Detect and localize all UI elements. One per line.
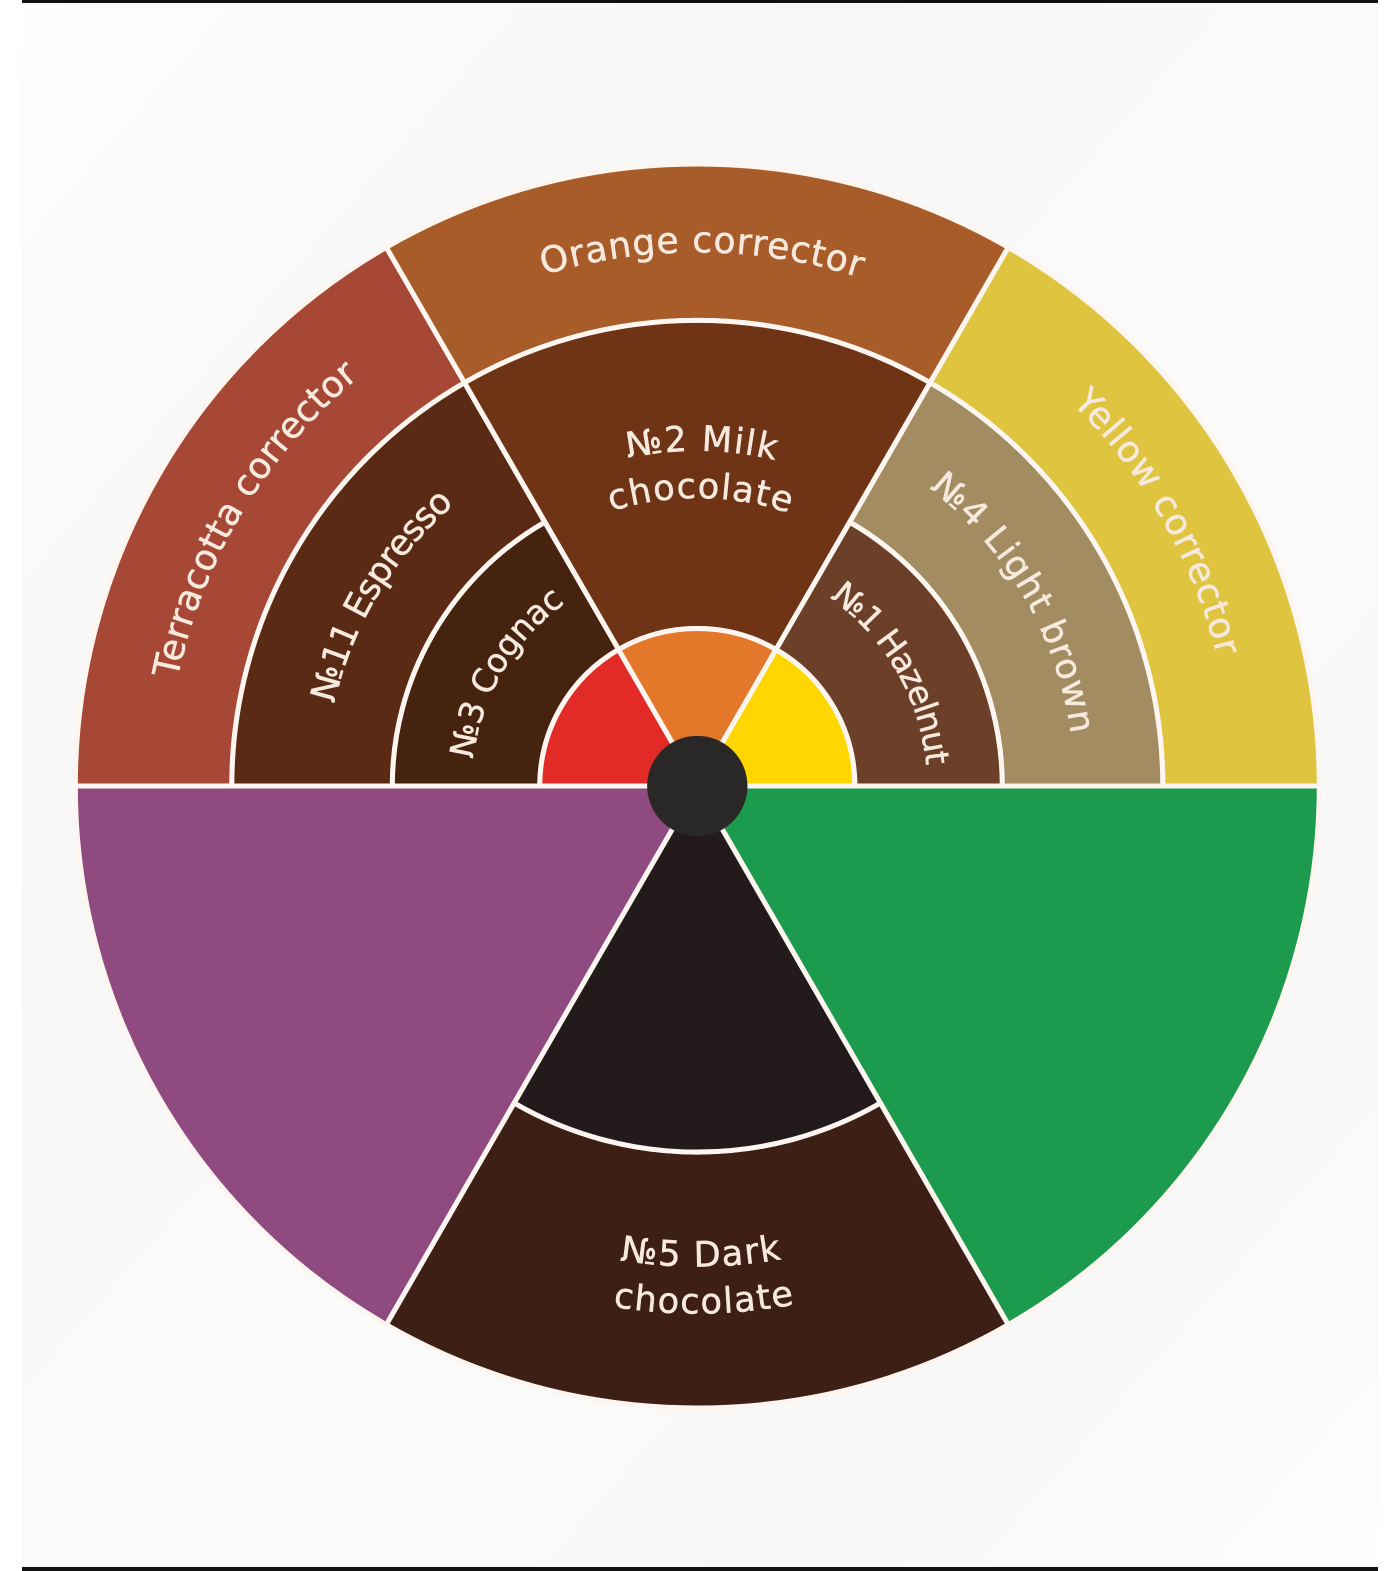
segment: dark chocolate outer <box>386 1103 1008 1408</box>
segment: orange corrector <box>386 164 1008 383</box>
segment: light brown <box>850 383 1163 786</box>
label: No.2 Milk chocolate: chocolate <box>610 472 791 512</box>
segment: hazelnut <box>776 522 1002 786</box>
segment: espresso <box>232 383 545 786</box>
label: No.2 Milk chocolate: №2 Milk <box>626 425 779 460</box>
segment: cognac <box>392 522 619 786</box>
segment: green <box>697 786 1319 1325</box>
inner segment: red <box>540 650 697 786</box>
label: No.5 Dark chocolate <box>616 1234 792 1314</box>
label: No.3 Cognac: №3 Cognac <box>449 590 564 758</box>
segment: purple <box>75 786 697 1325</box>
label: No.1 Hazelnut: №1 Hazelnut <box>830 580 949 765</box>
top border bar <box>22 0 1378 3</box>
full chart <box>78 166 1322 1410</box>
label: No.5 Dark chocolate: №5 Dark <box>620 1234 782 1267</box>
label: No.2 Milk chocolate <box>610 425 791 512</box>
segment: yellow corrector <box>930 247 1319 786</box>
segment: black inner <box>514 786 880 1152</box>
inner segment: yellow <box>697 650 855 786</box>
label: No.11 Espresso: №11 Espresso <box>310 494 450 703</box>
inner segment: orange <box>619 628 776 786</box>
bottom border bar <box>22 1567 1378 1571</box>
segment: terracotta corrector <box>75 247 465 786</box>
label: Terracotta corrector: Terracotta corrector <box>151 362 353 674</box>
label: Yellow corrector: Yellow corrector <box>1078 384 1237 653</box>
color wheel <box>75 164 1319 1408</box>
label: No.5 Dark chocolate: chocolate <box>616 1283 792 1314</box>
center hub <box>647 736 747 836</box>
label: No.4 Light brown: №4 Light brown <box>930 470 1090 732</box>
segment: milk chocolate <box>465 320 930 650</box>
label: Orange corrector: Orange corrector <box>541 232 866 276</box>
